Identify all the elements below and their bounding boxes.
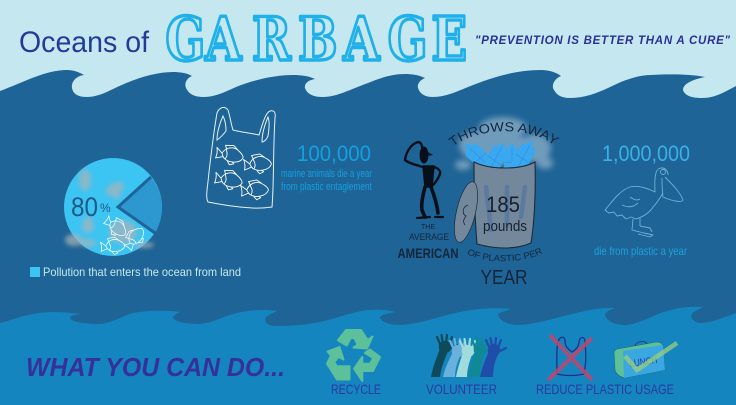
heading: GARBAGE: GARBAGE [165, 3, 467, 74]
smoke cloud behind bottles [455, 117, 553, 170]
can lid [450, 180, 482, 244]
legend: pollution from land: Pollution that enters the ocean from land [43, 265, 241, 279]
heading: what you can do: WHAT YOU CAN DO... [26, 352, 285, 382]
stat: 100,000 marine animals: from plastic entaglement [281, 181, 372, 193]
arc label: throws away: THROWS AWAY [448, 122, 560, 145]
stat: 1,000,000: 1,000,000 [602, 141, 690, 166]
label: year: YEAR [480, 267, 528, 289]
background: shallow water wave [0, 307, 736, 405]
tagline: "PREVENTION IS BETTER THAN A CURE" [475, 35, 731, 47]
icon: trash can with 185 pounds [450, 162, 535, 248]
stat: 100,000 marine animals: 100,000 [297, 141, 371, 166]
pie value: 80 [71, 192, 98, 222]
can ribs [486, 187, 525, 230]
icon: pelican [605, 168, 683, 237]
label: recycle: RECYCLE [331, 381, 381, 397]
smudged trash overlay [65, 169, 154, 248]
icon: raised hands [431, 335, 506, 377]
icon: crossed out plastic bag [548, 335, 592, 380]
heading: Oceans of: Oceans of [19, 26, 150, 59]
can label: 185 [486, 192, 520, 217]
icon: plastic bottles [461, 138, 539, 176]
label: the average american [398, 224, 458, 261]
icon: lunch box with check: LUNCH [629, 355, 658, 370]
label: the average american: AMERICAN [398, 245, 458, 261]
icon: average american figure [405, 142, 443, 218]
pie: slice dividers [118, 177, 155, 233]
stat: 100,000 marine animals: marine animals die a year [281, 168, 372, 180]
label: the average american: THE [421, 224, 435, 231]
icon: plastic bag with fish [207, 107, 275, 208]
fish outlines in pie [100, 213, 149, 256]
pie: main 80 percent slice [64, 158, 162, 256]
can body [474, 162, 535, 248]
pie value unit: % [100, 201, 111, 215]
arc label: of plastic per: OF PLASTIC PER [468, 248, 542, 262]
panel: land pollution pie chart [64, 158, 162, 256]
label: volunteer: VOLUNTEER [426, 381, 497, 397]
label: the average american: AVERAGE [409, 232, 449, 243]
icon: recycle [327, 330, 380, 381]
label: reduce plastic usage: REDUCE PLASTIC USAGE [536, 381, 674, 397]
icon: lunch box with check [614, 342, 677, 378]
caption: die from plastic a year: die from plastic a year [594, 244, 687, 258]
icon: trash can with 185 pounds: pounds [483, 218, 527, 235]
pie: remaining slice [118, 177, 162, 233]
stat: 100,000 marine animals [281, 141, 372, 193]
